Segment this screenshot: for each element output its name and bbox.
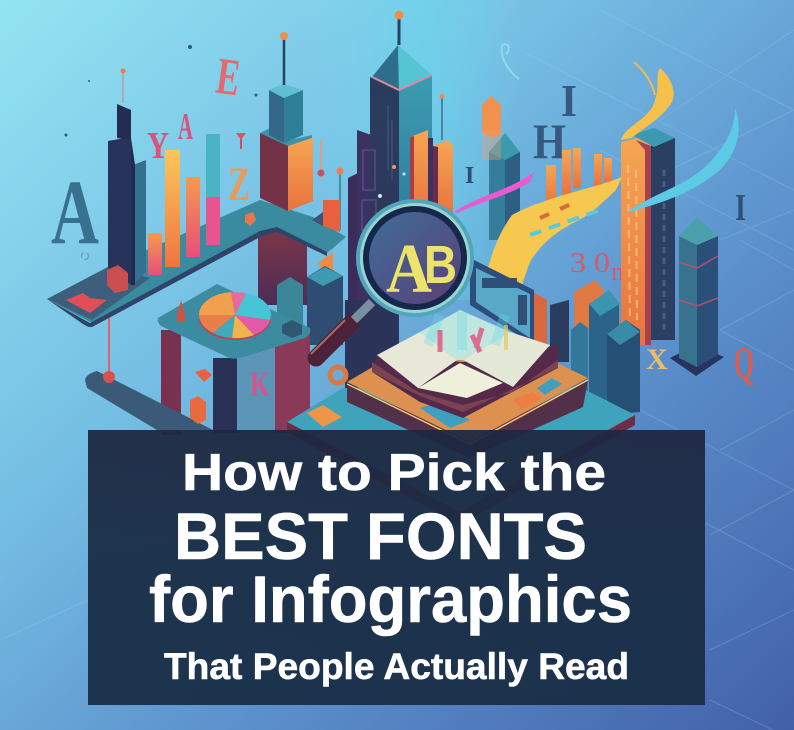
lower band platform	[85, 371, 213, 430]
second platform legs	[161, 330, 310, 435]
arch behind first platform	[258, 228, 307, 305]
floating letters left	[147, 48, 250, 211]
floating letters right: I	[735, 187, 746, 229]
pie chart	[199, 292, 271, 340]
floating letters left: Y	[147, 125, 169, 167]
title text	[149, 444, 632, 687]
AB letters: A	[386, 231, 432, 308]
title text: BEST FONTS	[174, 499, 587, 573]
small dots and pins	[64, 45, 344, 260]
floating letters right: I	[465, 163, 474, 189]
ring letter near handle	[330, 367, 346, 383]
bars chart	[148, 134, 220, 275]
stack platform under book	[287, 345, 635, 525]
floating letters right: H	[533, 113, 566, 169]
letter K: K	[250, 364, 270, 404]
floating letters left: Z	[228, 158, 250, 211]
small towers beside arch	[277, 266, 343, 345]
floating letters right: 3 0	[570, 248, 610, 279]
title panel	[88, 430, 705, 705]
thin red post	[108, 318, 110, 375]
AB letters: B	[424, 235, 457, 295]
floating letters left: E	[213, 48, 244, 107]
handle	[316, 322, 352, 358]
floating letters right: n	[611, 257, 624, 286]
floating letters right: I	[561, 75, 577, 126]
first platform with bars	[47, 104, 346, 327]
small props on second platform	[103, 300, 302, 424]
magnifying glass	[311, 199, 474, 358]
title text: That People Actually Read	[164, 646, 629, 687]
dark tower on platform	[108, 104, 146, 285]
central skyscraper	[348, 10, 453, 400]
cyan glow behind central tower	[300, 0, 520, 300]
floating letters right: X	[646, 343, 668, 376]
floating letters right	[465, 44, 754, 388]
open book	[372, 310, 558, 418]
colour swooshes	[454, 62, 739, 292]
floating letters left: A	[178, 106, 193, 148]
laptop screen	[470, 258, 534, 345]
lens	[356, 199, 474, 317]
dark buildings behind book	[345, 300, 398, 395]
small orange bars behind swoosh	[546, 148, 612, 205]
title text: How to Pick the	[182, 444, 606, 502]
second platform top	[158, 284, 310, 359]
letter A: A	[51, 161, 99, 263]
tower with orange and maroon faces	[260, 32, 313, 211]
title text: for Infographics	[149, 562, 632, 636]
tall orange tower with dark side	[621, 128, 675, 345]
floating letters right: Q	[734, 337, 754, 388]
right tower on base	[670, 217, 724, 376]
small teal tower	[482, 96, 520, 240]
building cluster lower right	[533, 280, 640, 415]
